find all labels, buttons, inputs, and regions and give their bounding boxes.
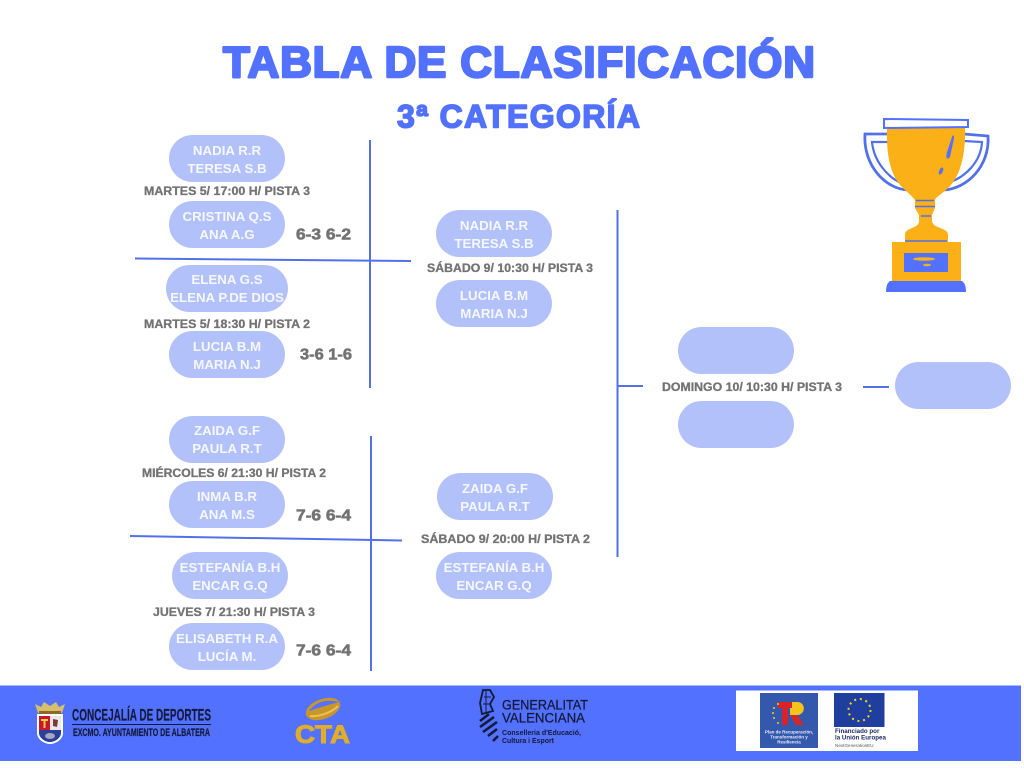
match: Elena vs Lucia: MARIA N.J [193, 357, 261, 372]
match: Zaida vs Inma: PAULA R.T [192, 441, 262, 456]
match: Estefania vs Elisabeth: ELISABETH R.A [176, 631, 278, 646]
champion slot [895, 362, 1011, 409]
subtitle: 3ª CATEGORÍA [397, 98, 640, 134]
match: Estefania vs Elisabeth [153, 552, 351, 670]
logo: Generalitat Valenciana: Cultura i Esport [502, 736, 554, 745]
logo: Plan de Recuperación and Unión Europea [736, 690, 918, 751]
match: Nadia vs Cristina: ANA A.G [199, 227, 255, 242]
final [662, 327, 842, 448]
match: Estefania vs Elisabeth: ENCAR G.Q [192, 578, 268, 593]
final: DOMINGO 10/ 10:30 H/ PISTA 3 [662, 382, 842, 394]
match: Nadia vs Cristina: NADIA R.R [193, 143, 261, 158]
logo: CTA [295, 693, 350, 749]
match: Estefania vs Elisabeth: ESTEFANÍA B.H [180, 560, 280, 575]
match: Elena vs Lucia [144, 265, 352, 378]
semifinal: Nadia vs Lucia [427, 210, 593, 327]
logo: Plan de Recuperación and Unión Europea: Financiado por [835, 728, 880, 735]
title: TABLA DE CLASIFICACIÓN [223, 37, 815, 87]
match: Nadia vs Cristina: 6-3 6-2 [296, 226, 351, 244]
semifinal: Zaida vs Estefania: ENCAR G.Q [456, 578, 532, 593]
match: Zaida vs Inma [142, 416, 351, 528]
match: Zaida vs Inma: MIÉRCOLES 6/ 21:30 H/ PISTA 2 [142, 467, 326, 480]
match: Zaida vs Inma: 7-6 6-4 [296, 508, 351, 524]
semifinal: Zaida vs Estefania: ZAIDA G.F [462, 481, 528, 496]
match: Elena vs Lucia: ELENA G.S [191, 272, 263, 287]
match: Nadia vs Cristina: CRISTINA Q.S [183, 209, 272, 224]
logo: Plan de Recuperación and Unión Europea: NextGenerationEU [835, 743, 874, 748]
bracket lines [130, 140, 889, 671]
icon: trophy [865, 119, 988, 292]
match: Nadia vs Cristina: TERESA S.B [187, 161, 267, 176]
semifinal: Zaida vs Estefania: PAULA R.T [460, 499, 530, 514]
semifinal: Nadia vs Lucia: TERESA S.B [454, 236, 534, 251]
semifinal: Nadia vs Lucia: NADIA R.R [460, 218, 528, 233]
logo: Concejalía de Deportes: EXCMO. AYUNTAMIENTO DE ALBATERA [73, 727, 210, 739]
logo: Plan de Recuperación and Unión Europea: Transformación y [770, 734, 808, 740]
footer band [0, 686, 1021, 761]
match: Estefania vs Elisabeth: LUCÍA M. [198, 649, 256, 664]
logo: Plan de Recuperación and Unión Europea: la Unión Europea [835, 734, 886, 742]
semifinal: Nadia vs Lucia: MARIA N.J [460, 306, 528, 321]
semifinal: Zaida vs Estefania: SÁBADO 9/ 20:00 H/ PISTA 2 [421, 533, 590, 546]
semifinal: Zaida vs Estefania: ESTEFANÍA B.H [444, 560, 544, 575]
logo: Plan de Recuperación and Unión Europea: Plan de Recuperación, [765, 730, 813, 734]
logo: Generalitat Valenciana: GENERALITAT [502, 698, 588, 712]
match: Nadia vs Cristina: MARTES 5/ 17:00 H/ PISTA 3 [144, 186, 310, 198]
match: Elena vs Lucia: MARTES 5/ 18:30 H/ PISTA 2 [144, 319, 310, 331]
logo: Concejalía de Deportes [35, 702, 211, 744]
match: Elena vs Lucia: LUCIA B.M [193, 339, 261, 354]
semifinal: Nadia vs Lucia: SÁBADO 9/ 10:30 H/ PISTA 3 [427, 262, 593, 275]
logo: CTA: CTA [295, 721, 350, 749]
semifinal: Zaida vs Estefania [421, 473, 590, 599]
match: Elena vs Lucia: 3-6 1-6 [300, 346, 352, 364]
logo: Generalitat Valenciana [480, 690, 588, 745]
match: Estefania vs Elisabeth: 7-6 6-4 [296, 642, 351, 660]
semifinal: Nadia vs Lucia: LUCIA B.M [460, 288, 528, 303]
match: Zaida vs Inma: ZAIDA G.F [194, 423, 260, 438]
logo: Concejalía de Deportes: CONCEJALÍA DE DEPORTES [72, 706, 211, 725]
logo: Plan de Recuperación and Unión Europea: Resiliencia [777, 740, 801, 744]
match: Nadia vs Cristina [144, 135, 351, 248]
match: Zaida vs Inma: INMA B.R [197, 489, 257, 504]
match: Estefania vs Elisabeth: JUEVES 7/ 21:30 H/ PISTA 3 [153, 607, 315, 619]
logo: Generalitat Valenciana: VALENCIANA [502, 711, 585, 726]
match: Zaida vs Inma: ANA M.S [199, 507, 255, 522]
match: Elena vs Lucia: ELENA P.DE DIOS [170, 290, 284, 305]
logo: Generalitat Valenciana: Conselleria d'Educació, [502, 728, 581, 737]
